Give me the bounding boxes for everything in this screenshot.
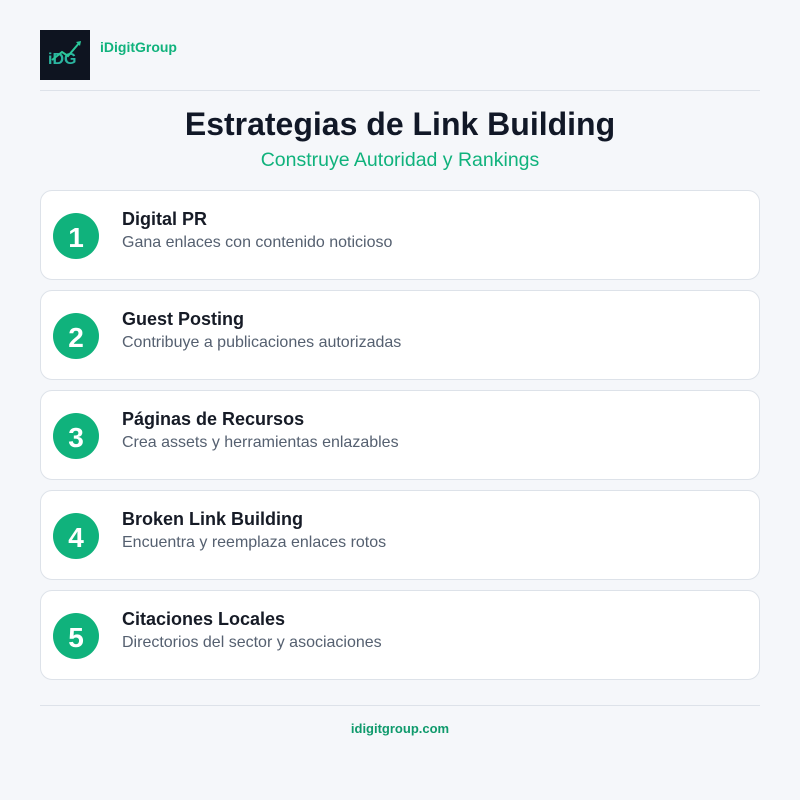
- card 3: Páginas de Recursos: [122, 409, 304, 429]
- brand name: iDigitGroup: [100, 39, 177, 55]
- logo: [40, 30, 90, 80]
- card 3: [40, 390, 760, 480]
- card 5: Directorios del sector y asociaciones: [122, 634, 382, 651]
- card 5: Citaciones Locales: [122, 609, 285, 629]
- card 3: 3: [68, 422, 84, 453]
- card 1: 1: [68, 222, 84, 253]
- footer: idigitgroup.com: [351, 721, 449, 736]
- card 4: [40, 490, 760, 580]
- card 4: Broken Link Building: [122, 509, 303, 529]
- card 3: Crea assets y herramientas enlazables: [122, 434, 399, 451]
- subtitle: Construye Autoridad y Rankings: [261, 149, 539, 171]
- card 5: [40, 590, 760, 680]
- logo: iDG: [48, 51, 76, 68]
- card 1: [40, 190, 760, 280]
- card 1: Digital PR: [122, 209, 207, 229]
- card 1: Gana enlaces con contenido noticioso: [122, 234, 392, 251]
- title: Estrategias de Link Building: [185, 106, 615, 142]
- card 4: 4: [68, 522, 84, 553]
- card 2: 2: [68, 322, 84, 353]
- card 4: Encuentra y reemplaza enlaces rotos: [122, 534, 386, 551]
- card 2: [40, 290, 760, 380]
- card 2: Contribuye a publicaciones autorizadas: [122, 334, 401, 351]
- card 5: 5: [68, 622, 84, 653]
- card 2: Guest Posting: [122, 309, 244, 329]
